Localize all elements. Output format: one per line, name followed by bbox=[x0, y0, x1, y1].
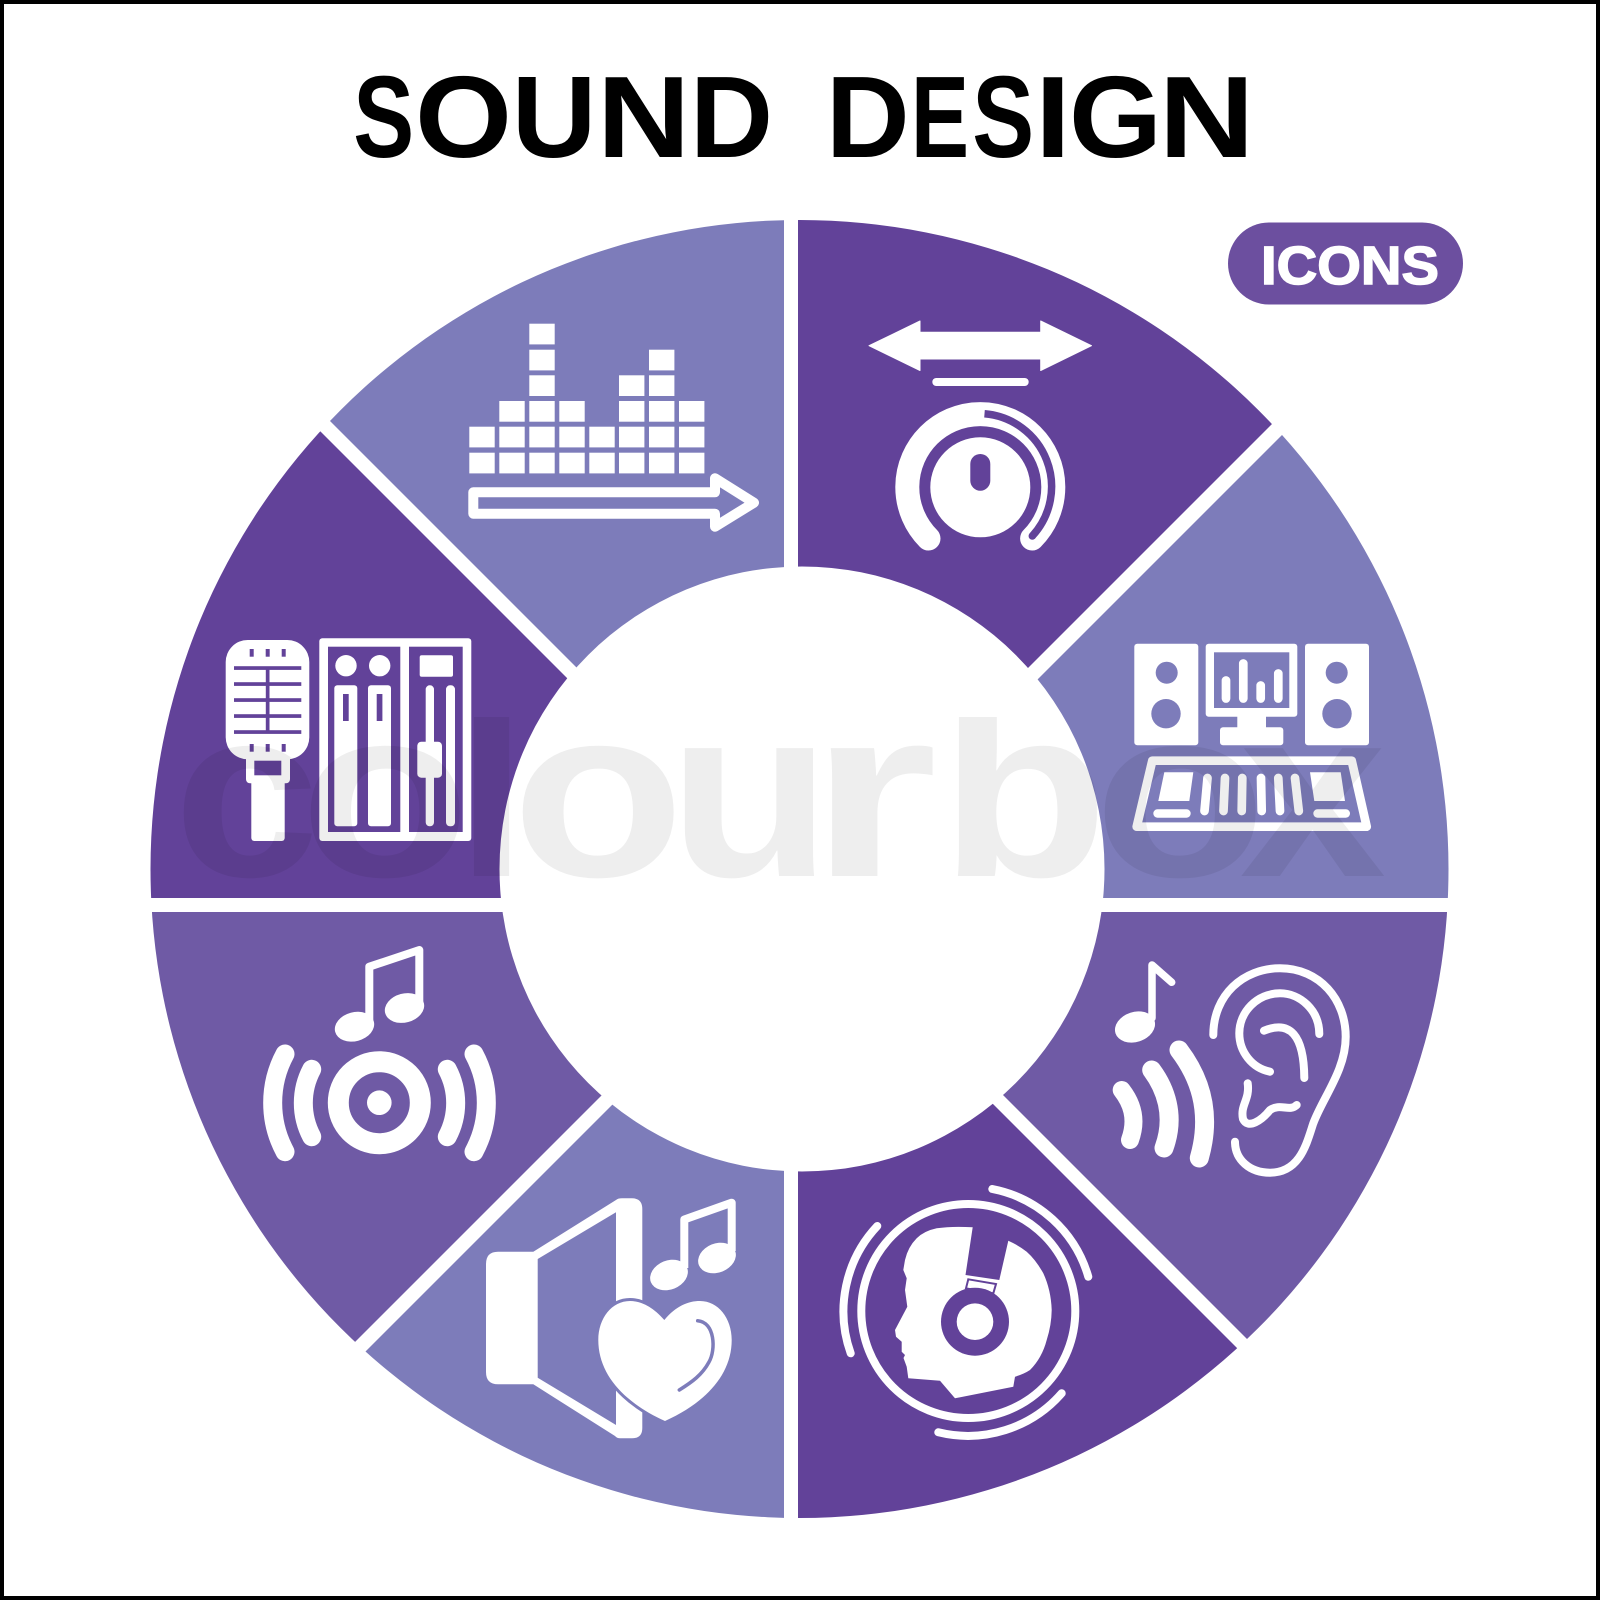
title: I bbox=[1035, 52, 1071, 182]
watermark: o bbox=[1094, 658, 1267, 928]
icon: equalizer with arrow bbox=[469, 324, 754, 527]
watermark: o bbox=[300, 658, 470, 928]
segment: bottom left bbox=[366, 1104, 784, 1518]
title: E bbox=[911, 52, 969, 182]
title: N bbox=[1159, 52, 1255, 182]
segment: right lower bbox=[1003, 912, 1447, 1339]
title: S bbox=[972, 52, 1034, 182]
title bbox=[353, 52, 1255, 182]
segment: left lower bbox=[152, 912, 602, 1342]
watermark: o bbox=[512, 658, 685, 928]
icon: stereo width knob bbox=[869, 321, 1092, 540]
icon: microphone and mixer bbox=[226, 638, 471, 841]
icon: studio desk with monitors and keyboard bbox=[1134, 644, 1369, 827]
watermark: c bbox=[174, 658, 320, 928]
segment: right upper bbox=[1038, 435, 1448, 898]
watermark: r bbox=[809, 658, 938, 928]
icon: speaker cone with sound waves and note bbox=[273, 950, 486, 1152]
title: D bbox=[826, 52, 910, 182]
segment: bottom right bbox=[798, 1104, 1238, 1518]
title: U bbox=[512, 52, 596, 182]
title: N bbox=[597, 52, 690, 182]
segment: top left bbox=[330, 220, 784, 668]
title: D bbox=[690, 52, 773, 182]
icon: head with headphones bbox=[843, 1189, 1088, 1436]
watermark: b bbox=[940, 658, 1108, 928]
icon: ear listening to music bbox=[1111, 965, 1346, 1173]
segment: top right bbox=[798, 220, 1272, 668]
badge: icons: ICONS bbox=[1261, 236, 1439, 296]
title: O bbox=[415, 52, 512, 182]
title: G bbox=[1069, 52, 1162, 182]
watermark: x bbox=[1240, 658, 1386, 928]
title: S bbox=[353, 52, 414, 182]
icon: speaker with heart and music note bbox=[486, 1198, 741, 1438]
ring of eight segments bbox=[150, 220, 1448, 1518]
badge: icons bbox=[1228, 222, 1463, 304]
segment: left upper bbox=[150, 431, 568, 898]
watermark: u bbox=[668, 658, 832, 928]
watermark: l bbox=[456, 658, 527, 928]
watermark bbox=[184, 717, 1384, 878]
